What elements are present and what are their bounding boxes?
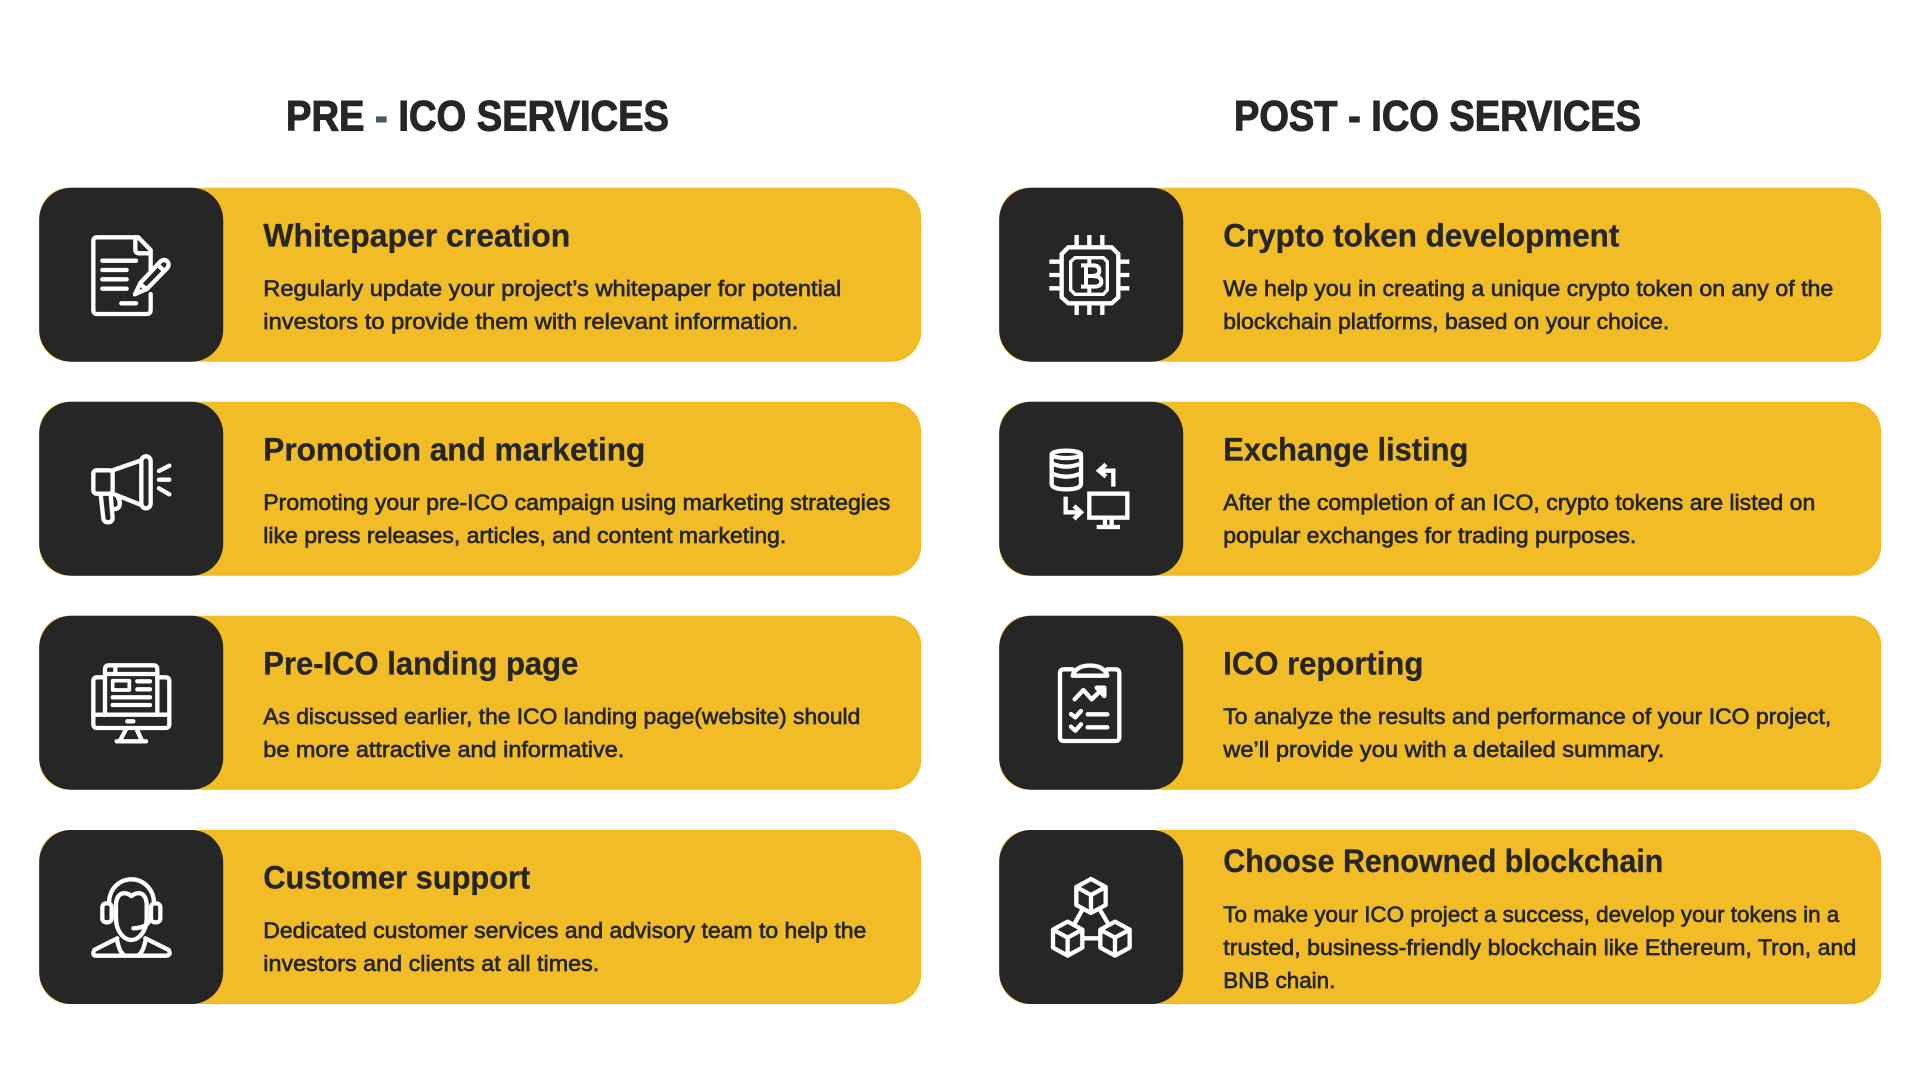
panel: exchange listing [999,402,1881,576]
icon tile [39,616,223,790]
card description line 2: investors and clients at all times. [263,951,599,976]
panel: promotion and marketing [39,402,921,576]
heading: pre-ICO services: PRE - ICO SERVICES [286,93,669,141]
card title: Whitepaper creation [263,218,570,254]
card background [39,830,921,1004]
card description line 2: like press releases, articles, and content marketing. [263,523,786,548]
icon tile [999,830,1183,1004]
card title: Promotion and marketing [263,432,645,468]
card background [999,402,1881,576]
card title: Pre-ICO landing page [263,646,578,682]
card background [999,830,1881,1004]
card description: After the completion of an ICO, crypto tokens are listed on [1223,490,1815,515]
panel: pre-ICO landing page [39,616,921,790]
icon tile [39,188,223,362]
card title: ICO reporting [1223,646,1423,682]
card background [39,188,921,362]
icon: desktop with web page [93,665,169,741]
card description: To analyze the results and performance of your ICO project, [1223,704,1831,729]
card background [39,402,921,576]
icon tile [39,402,223,576]
icon: bitcoin chip [1049,235,1129,315]
panel: ICO reporting [999,616,1881,790]
icon tile [39,830,223,1004]
card description: Dedicated customer services and advisory team to help the [263,918,866,943]
panel: whitepaper creation [39,188,921,362]
icon tile [999,188,1183,362]
icon: connected blocks [1053,879,1130,956]
card description line 2: be more attractive and informative. [263,737,624,762]
icon: megaphone [93,456,169,522]
card background [999,188,1881,362]
card background [39,616,921,790]
icon: document with pen [93,237,169,314]
icon: database and monitor exchange [1052,451,1127,527]
card title: Customer support [263,860,531,896]
heading: post-ICO services: POST - ICO SERVICES [1234,93,1641,141]
icon tile [999,616,1183,790]
card description line 2: we’ll provide you with a detailed summary. [1222,737,1664,762]
card title: Crypto token development [1223,218,1620,254]
card description: As discussed earlier, the ICO landing page(website) should [263,704,860,729]
icon: clipboard report [1060,665,1119,741]
card description: Regularly update your project’s whitepaper for potential [263,276,841,301]
card title: Choose Renowned blockchain [1223,843,1663,879]
card description: We help you in creating a unique crypto token on any of the [1223,276,1833,301]
panel: crypto token development [999,188,1881,362]
icon tile [999,402,1183,576]
panel: customer support [39,830,921,1004]
card description line 2: investors to provide them with relevant information. [263,309,798,334]
card description line 2: blockchain platforms, based on your choice. [1223,309,1669,334]
card description line 2: popular exchanges for trading purposes. [1223,523,1636,548]
card description: To make your ICO project a success, develop your tokens in a [1223,902,1840,927]
card description line 2: trusted, business-friendly blockchain like Ethereum, Tron, and [1223,935,1856,960]
card background [999,616,1881,790]
panel: choose renowned blockchain [999,830,1881,1004]
icon: support agent with headset [93,879,170,956]
card title: Exchange listing [1223,432,1468,468]
card description: Promoting your pre-ICO campaign using marketing strategies [263,490,890,515]
card description line 3: BNB chain. [1223,968,1335,993]
